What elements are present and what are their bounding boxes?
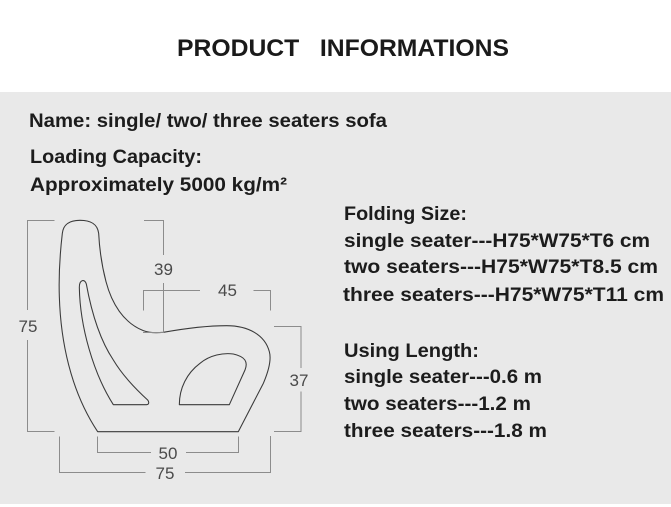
- using length two seaters: two seaters---1.2 m: [344, 393, 531, 415]
- dimension: seat height 37: 37: [290, 371, 308, 390]
- loading capacity value: Approximately 5000 kg/m²: [30, 174, 288, 196]
- dimension: base width 50: 50: [159, 444, 177, 463]
- dimension: seat height 37: [274, 326, 308, 432]
- dimension: height 75: 75: [19, 317, 37, 336]
- folding size heading: Folding Size:: [344, 203, 467, 225]
- dimension: base width 50: [98, 436, 238, 463]
- dimension: overall width 75: [60, 436, 270, 483]
- product name: Name: single/ two/ three seaters sofa: [29, 110, 387, 132]
- sofa outer outline: [59, 220, 270, 432]
- dimension: back height 39: 39: [154, 260, 173, 279]
- using length three seaters: three seaters---1.8 m: [344, 420, 547, 442]
- sofa dimension diagram: [19, 220, 308, 483]
- sofa seat cutout: [179, 354, 246, 405]
- folding size single seater: single seater---H75*W75*T6 cm: [344, 230, 650, 252]
- using length heading: Using Length:: [344, 340, 479, 362]
- title: PRODUCT INFORMATIONS: [177, 35, 509, 62]
- dimension: seat depth 45: [144, 281, 270, 310]
- loading capacity: [30, 146, 288, 196]
- dimension: seat depth 45: 45: [218, 281, 237, 300]
- dimension: back height 39: [143, 220, 173, 332]
- using length block: [344, 340, 547, 442]
- dimension: overall width 75: 75: [156, 464, 174, 483]
- using length single seater: single seater---0.6 m: [344, 366, 542, 388]
- dimension: height 75: [19, 220, 54, 432]
- sofa side profile: [59, 220, 270, 432]
- sofa back cutout: [79, 281, 149, 405]
- folding size two seaters: two seaters---H75*W75*T8.5 cm: [344, 256, 658, 278]
- loading capacity heading: Loading Capacity:: [30, 146, 202, 168]
- folding size block: [343, 203, 664, 306]
- folding size three seaters: three seaters---H75*W75*T11 cm: [343, 284, 664, 306]
